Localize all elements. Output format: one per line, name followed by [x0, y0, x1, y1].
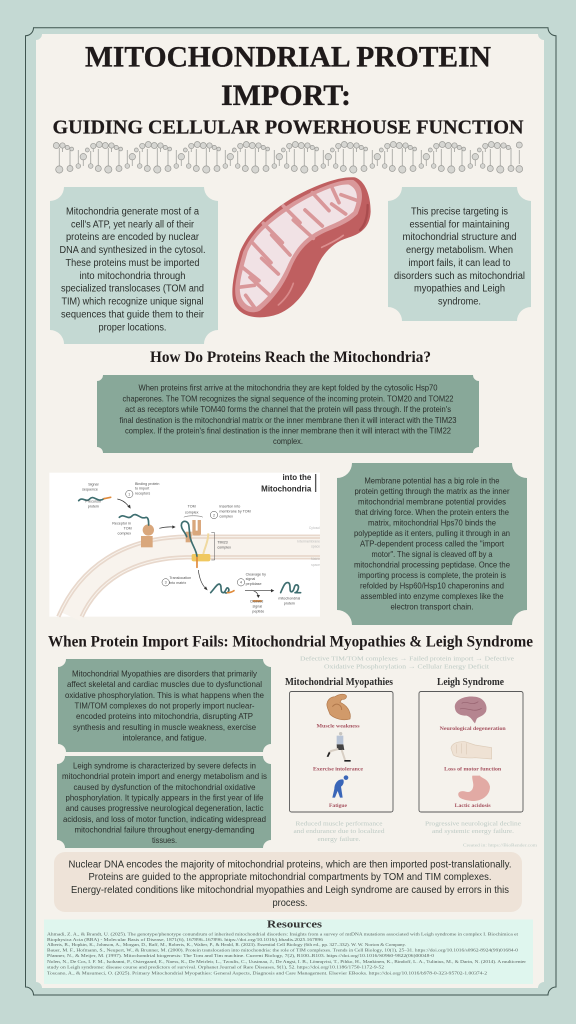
panel: intro left: TIM) which recognize unique signal: [62, 297, 204, 308]
diagram labels: peptide: [252, 610, 264, 614]
panel: summary: [54, 852, 522, 912]
heading: when protein import fails: When Protein Import Fails: Mitochondrial Myopathies & Leigh Syndrome: [48, 634, 533, 650]
step number circles: [126, 490, 245, 586]
diagram labels: protein: [284, 601, 295, 605]
panel: summary: Nuclear DNA encodes the majority of mitochondrial proteins, which are then imported post-translationally.: [68, 860, 512, 870]
panel: resources: [44, 920, 533, 984]
diagram labels: complex: [185, 510, 199, 514]
caption: Leigh: Progressive neurological decline: [425, 820, 521, 828]
diagram: protein import into the mitochondria: Cytosol: [309, 526, 320, 530]
title: [85, 41, 491, 112]
panel: TOM and TIM text: final destination is the mitochondrial matrix or the inner membrane then it will interact with the TIM23: [120, 415, 457, 425]
panel: membrane potential text: protein getting through the matrix as the inner: [354, 486, 510, 496]
diagram labels: sequence: [82, 488, 98, 492]
panel: intro left: proteins are encoded by nuclear: [66, 232, 200, 243]
panel: membrane potential text: ATP-dependent process called the "import: [360, 539, 505, 549]
diagram: protein import into the mitochondria: complex: [219, 514, 233, 518]
panel: Leigh syndrome text: [57, 756, 271, 848]
panel: summary: Energy-related conditions like mitochondrial myopathies and Leigh syndrome are caused by errors in this: [71, 885, 509, 896]
lipid bilayer divider: [53, 142, 523, 173]
panel: summary: Proteins are guided to the appropriate mitochondrial compartments by TOM and TIM complexes.: [88, 872, 492, 883]
panel: membrane potential text: that driving force. When the protein enters the: [355, 507, 509, 517]
diagram: protein import into the mitochondria: Binding protein: [135, 482, 159, 486]
pathway caption: Oxidative Phosphorylation → Cellular Energy Deficit: [324, 664, 489, 670]
diagram labels: [82, 482, 300, 614]
panel: mitochondrial myopathies text: [58, 659, 271, 752]
panel: mitochondrial myopathies text: intolerance, and fatigue.: [122, 732, 206, 742]
diagram labels: Signal: [88, 482, 99, 486]
panel: TOM and TIM text: [97, 375, 479, 453]
diagram: protein import into the mitochondria: space: [311, 563, 320, 567]
panel: intro left: proper locations.: [98, 322, 166, 333]
diagram labels: protein: [88, 504, 99, 508]
title: IMPORT:: [221, 79, 351, 112]
diagram: protein import into the mitochondria: membrane by TOM: [219, 509, 251, 513]
diagram: protein import into the mitochondria: 4: [240, 581, 242, 585]
panel: mitochondrial myopathies text: affect skeletal and cardiac muscles due to dysfunctional: [67, 679, 262, 689]
icon: runner: [327, 732, 351, 762]
reference list: study on Leigh syndrome: disease course and predictors of survival. Orphanet Journal of Rare Diseases, 9(1), 52. https://doi.org/10.1186/1750-1172-9-52: [47, 964, 384, 970]
caption: myopathies: and endurance due to localized: [294, 828, 385, 835]
icon: fatigued person: [332, 775, 348, 798]
diagram: protein import into the mitochondria: Matrix: [311, 557, 320, 561]
diagram labels: complex: [118, 532, 131, 536]
panel: Leigh syndrome text: phosphorylation. It typically appears in the first year of life: [66, 792, 264, 802]
diagram: protein import into the mitochondria: peptidase: [246, 582, 262, 586]
diagram: protein import into the mitochondria: into matrix: [169, 581, 186, 585]
column: Leigh syndrome: Neurological degeneration: [440, 727, 506, 732]
panel: Leigh syndrome text: caused by dysfunction of the mitochondrial oxidative: [74, 782, 256, 792]
panel: intro right: energy metabolism. When: [406, 245, 513, 256]
diagram labels: Cleaved: [250, 599, 263, 603]
column: mitochondrial myopathies: Muscle weakness: [316, 724, 360, 730]
panel: mitochondrial myopathies text: encoded proteins into mitochondria, disrupting ATP: [76, 711, 253, 721]
panel: intro left: sequences that guide them to their: [61, 310, 205, 320]
panel: intro right: mitochondrial structure and: [402, 232, 516, 243]
panel: Leigh syndrome text: mitochondrial protein import and energy metabolism and is: [62, 771, 267, 781]
panel: membrane potential text: [337, 463, 527, 625]
diagram labels: Precursor: [85, 499, 102, 503]
panel: intro right: essential for maintaining: [410, 219, 510, 230]
caption: Leigh: and systemic energy failure.: [432, 828, 514, 835]
panel: membrane potential text: importing process is complete, the protein is: [358, 570, 506, 580]
icon: fist: [451, 742, 492, 759]
panel: intro left: These proteins must be imported: [66, 258, 200, 269]
icon: mitochondrion: [232, 177, 371, 317]
diagram: protein import into the mitochondria: Translocation: [169, 576, 191, 580]
caption: myopathies: Reduced muscle performance: [296, 820, 383, 828]
diagram title: into the: [282, 473, 312, 482]
icon: flexed arm: [327, 694, 350, 720]
panel: membrane potential text: electron transport chain.: [390, 602, 474, 612]
column: mitochondrial myopathies: Fatigue: [329, 804, 347, 809]
panel: mitochondrial myopathies text: TIM/TOM complexes do not properly import nuclear-: [74, 700, 255, 710]
title: MITOCHONDRIAL PROTEIN: [85, 41, 491, 74]
panel: intro right: myopathies and Leigh: [414, 284, 505, 295]
diagram: protein import into the mitochondria: receptors: [135, 491, 150, 495]
diagram: protein import into the mitochondria: 2: [213, 513, 215, 517]
resources heading: Resources: [267, 920, 322, 930]
panel: TOM and TIM text: act as receptors while TOM40 forms the channel that the protein will pass through. If the protein's: [125, 404, 451, 414]
reference list: Pfanner, N., & Meijer, M. (1997). Mitochondrial biogenesis: The Tom and Tim machine. Current Biology, 7(2), R100–R103. https://doi.org/10.1016/S0960-9822(06)00048-0: [47, 953, 435, 959]
column: mitochondrial myopathies: Mitochondrial Myopathies: [285, 676, 394, 688]
panel: intro left: specialized translocases (TOM and: [61, 284, 204, 295]
diagram: protein import into the mitochondria: Insertion into: [219, 505, 240, 509]
icon: brain: [455, 697, 487, 723]
caption: myopathies: energy failure.: [318, 836, 361, 843]
panel: intro right: import fails, it can lead to: [408, 258, 511, 269]
panel: intro right: [388, 187, 531, 321]
credit: Created in: https://BioRender.com: [463, 842, 538, 848]
diagram labels: Receptor in: [112, 521, 131, 525]
diagram labels: TOM: [124, 526, 132, 530]
panel: Leigh syndrome text: acidosis, and loss of motor function, indicating widespread: [63, 814, 266, 824]
panel: membrane potential text: refolded by Hsp60/Hsp10 chaperonins and: [360, 581, 504, 591]
membrane bands: [58, 537, 320, 617]
panel: Leigh syndrome text: mitochondrial failure throughout energy-demanding: [74, 824, 255, 834]
column: mitochondrial myopathies: [285, 676, 394, 812]
panel: intro left: Mitochondria generate most of a: [66, 206, 200, 218]
diagram: protein import into the mitochondria: TIM23: [217, 540, 228, 544]
panel: membrane potential text: assembled into enzyme complexes like the: [360, 591, 504, 601]
caption: Leigh: [425, 820, 521, 835]
panel: mitochondrial myopathies text: oxidative phosphorylation. This is what happens when the: [65, 690, 264, 700]
panel: intro right: syndrome.: [438, 297, 481, 308]
panel: membrane potential text: polypeptide as it enters, pulling it through in an: [354, 528, 510, 538]
panel: intro left: cell's ATP, yet nearly all of their: [71, 219, 195, 230]
diagram labels: mitochondrial: [278, 596, 300, 600]
TIM23 complex: [192, 554, 210, 561]
pathway caption: [300, 656, 514, 670]
diagram title: Mitochondria: [261, 485, 312, 494]
subtitle: GUIDING CELLULAR POWERHOUSE FUNCTION: [52, 117, 524, 138]
reference list: Nolen, N., De Cos, I. F. M., Isohanni, P., Ostergaard, E., Naess, K., De Meirleir, L., Tzoulis, C., Uusimaa, J., De Angst, I. B., Lönnqvist, T., Pihko, H., Mankinen, K., Bindoff, L. A., Tulinius, M., & Darin, N. (2014). A multicenter: [47, 959, 527, 965]
diagram: protein import into the mitochondria: to import: [135, 487, 149, 491]
caption: myopathies: [294, 820, 385, 843]
pathway caption: Defective TIM/TOM complexes → Failed protein import → Defective: [300, 656, 514, 662]
diagram: protein import into the mitochondria: space: [311, 545, 320, 549]
panel: intro left: [50, 187, 218, 344]
diagram: protein import into the mitochondria: Intermembrane: [297, 540, 320, 544]
diagram: protein import into the mitochondria: 3: [165, 581, 167, 585]
reference list: Alberts, B., Hopkin, K., Johnson, A., Morgan, D., Raff, M., Roberts, K., Walter, P., & Heald, R. (2023). Essential Cell Biology (6th ed., pp. 327–332). W. W. Norton & Company.: [47, 942, 406, 948]
panel: intro left: into mitochondria through: [80, 271, 186, 282]
diagram: protein import into the mitochondria: complex: [217, 545, 231, 549]
panel: intro left: DNA and synthesized in the cytosol.: [60, 245, 206, 256]
diagram title: [261, 473, 312, 494]
panel: TOM and TIM text: chaperones. The TOM recognizes the signal sequence of the incoming protein. TOM20 and TOM22: [122, 393, 454, 403]
panel: membrane potential text: mitochondrial membrane potential provides: [358, 497, 506, 507]
reference list: Toscano, A., & Musumeci, O. (2025). Primary Mitochondrial Myopathies: General Aspects, Diagnosis and Care Management. Elsevier EBooks. https://doi.org/10.1016/b978-0-323-95702-1.00374-2: [47, 970, 487, 976]
receptor and TOM complex: [141, 520, 201, 547]
diagram: protein import into the mitochondria: signal: [246, 577, 255, 581]
panel: TOM and TIM text: complex. If the protein's final destination is the inner membrane then it will interact with the TIM22: [125, 426, 451, 436]
protein strands: [79, 498, 301, 593]
reference list: Biophysica Acta (BBA) - Molecular Basis of Disease, 1871(6), 167896–167896. https://doi.org/10.1016/j.bbadis.2025.167896: [47, 937, 324, 943]
reference list: Bauer, M. F., Hofmann, S., Neupert, W., & Brunner, M. (2000). Protein translocation into mitochondria: the role of TIM complexes. Trends in Cell Biology, 10(1), 25–31. https://doi.org/10.1016/s0962-8924(99)01684-0: [47, 948, 519, 954]
panel: TOM and TIM text: complex.: [273, 436, 303, 446]
panel: summary: process.: [272, 898, 308, 909]
panel: intro right: This precise targeting is: [411, 206, 508, 218]
heading: how do proteins reach: How Do Proteins Reach the Mitochondria?: [150, 349, 431, 366]
column: Leigh syndrome: [419, 676, 523, 812]
icon: stomach: [458, 776, 490, 801]
panel: membrane potential text: Membrane potential has a big role in the: [364, 476, 500, 486]
panel: Leigh syndrome text: and causes progressive neurological degeneration, lactic: [66, 803, 264, 813]
panel: mitochondrial myopathies text: Mitochondrial Myopathies are disorders that primarily: [72, 668, 258, 678]
diagram: protein import into the mitochondria: [49, 473, 320, 617]
panel: mitochondrial myopathies text: synthesis and resulting in muscle weakness, exercise: [73, 722, 256, 732]
reference list: [47, 932, 527, 976]
panel: TOM and TIM text: When proteins first arrive at the mitochondria they are kept folded by the cytosolic Hsp70: [138, 383, 438, 393]
column: Leigh syndrome: Leigh Syndrome: [437, 676, 504, 688]
panel: membrane potential text: motor". The signal is cleaved off by a: [372, 549, 493, 559]
panel: Leigh syndrome text: tissues.: [152, 835, 177, 845]
diagram labels: TOM: [188, 505, 196, 509]
panel: intro right: disorders such as mitochondrial: [394, 271, 525, 282]
diagram: protein import into the mitochondria: 1: [128, 492, 130, 496]
diagram labels: signal: [253, 605, 262, 609]
diagram: protein import into the mitochondria: Cleavage by: [246, 572, 266, 576]
column: Leigh syndrome: Lactic acidosis: [455, 804, 491, 809]
panel: Leigh syndrome text: Leigh syndrome is characterized by severe defects in: [73, 760, 256, 770]
arrows: [117, 499, 273, 597]
panel: membrane potential text: mitochondrial processing peptidase. Once the: [354, 560, 510, 570]
column: Leigh syndrome: Loss of motor function: [444, 768, 502, 772]
panel: membrane potential text: matrix, mitochondrial Hps70 binds the: [368, 518, 496, 528]
column: mitochondrial myopathies: Exercise intolerance: [313, 768, 363, 772]
reference list: Ahmadi, Z. A., & Brandt, U. (2025). The genotype/phenotype conundrum of inherited mitochondrial disorders: Insights from a survey of mtDNA mutations associated with Leigh syndrome in complex I. Biochimica et: [47, 932, 519, 938]
